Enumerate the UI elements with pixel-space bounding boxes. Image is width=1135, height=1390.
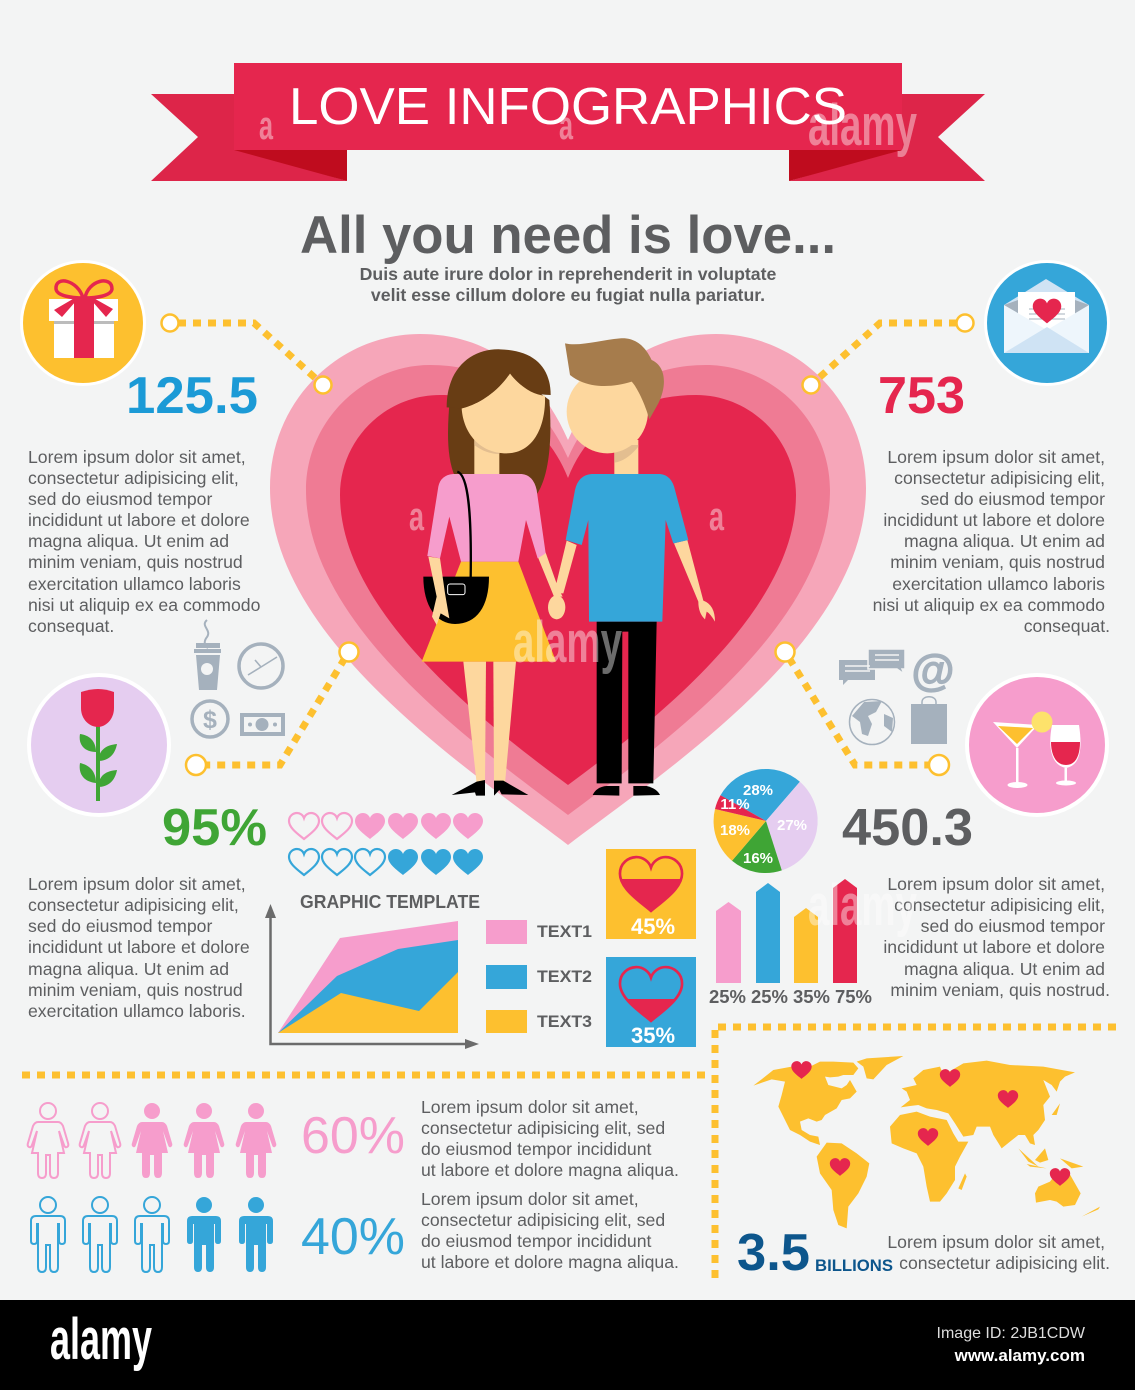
- stat: 3.5 billions: 3.5: [737, 1224, 810, 1282]
- text block: top right: [873, 447, 1110, 636]
- arrow bar chart: 25%: [709, 987, 746, 1007]
- world map: [753, 1056, 1100, 1228]
- text block: middle right: magna aliqua. Ut enim ad: [904, 959, 1105, 979]
- text block: middle right: consectetur adipisicing elit,: [894, 895, 1105, 915]
- watermarks: a: [559, 104, 573, 148]
- text block: middle left: sed do eiusmod tempor: [28, 916, 212, 936]
- footer image id: Image ID: 2JB1CDW: [937, 1325, 1086, 1342]
- pie chart: 27%: [777, 817, 807, 834]
- arrow bar chart: 25%: [751, 987, 788, 1007]
- text block: map: [887, 1232, 1110, 1273]
- stat: 3.5 billions: [737, 1224, 893, 1282]
- text block: men: Lorem ipsum dolor sit amet,: [421, 1189, 639, 1209]
- chart title: GRAPHIC TEMPLATE: [300, 892, 480, 912]
- stat: 40%: 40%: [301, 1208, 405, 1266]
- text block: men: do eiusmod tempor incididunt: [421, 1231, 652, 1251]
- connector: letter to heart: [802, 314, 974, 394]
- stat: 125.5: 125.5: [126, 367, 258, 425]
- text block: map: consectetur adipisicing elit.: [899, 1253, 1110, 1273]
- chart legend: [486, 920, 592, 1033]
- text block: top left: consectetur adipisicing elit,: [28, 468, 239, 488]
- icon: shopping bag: [911, 697, 947, 744]
- subheading: Duis aute irure dolor in reprehenderit in voluptate: [360, 264, 777, 284]
- woman figure: [422, 349, 563, 796]
- banner title text: LOVE INFOGRAPHICS: [289, 78, 847, 136]
- text block: middle right: minim veniam, quis nostrud.: [890, 980, 1110, 1000]
- text block: men: consectetur adipisicing elit, sed: [421, 1210, 665, 1230]
- icon: at sign: @: [912, 646, 954, 695]
- watermarks: alamy: [808, 93, 917, 158]
- title banner ribbon: [151, 63, 985, 181]
- text block: top right: incididunt ut labore et dolore: [883, 510, 1105, 530]
- watermarks: a: [259, 104, 273, 148]
- icon: rose: [27, 673, 171, 817]
- text block: women: [421, 1097, 679, 1180]
- text block: middle right: Lorem ipsum dolor sit amet,: [887, 874, 1105, 894]
- icon: dollar coin: [192, 701, 228, 737]
- man figure: [554, 338, 715, 796]
- icon: gift: [20, 260, 146, 386]
- text block: women: consectetur adipisicing elit, sed: [421, 1118, 665, 1138]
- text block: top right: nisi ut aliquip ex ea commodo: [873, 595, 1105, 615]
- text block: men: ut labore et dolore magna aliqua.: [421, 1252, 679, 1272]
- text block: map: Lorem ipsum dolor sit amet,: [887, 1232, 1105, 1252]
- heart gauge 45%: [606, 849, 696, 939]
- connector: cocktails to heart: [776, 642, 949, 775]
- icon: coffee cup: [194, 620, 221, 690]
- text block: middle right: sed do eiusmod tempor: [921, 916, 1105, 936]
- icon: cocktails: [965, 673, 1109, 817]
- text block: top right: consequat.: [1024, 616, 1110, 636]
- connector: rose to heart: [186, 642, 358, 775]
- stat: 95%: 95%: [162, 799, 267, 857]
- text block: top left: Lorem ipsum dolor sit amet,: [28, 447, 246, 467]
- pie chart: 11%: [720, 796, 750, 813]
- text block: top left: minim veniam, quis nostrud: [28, 552, 243, 572]
- text block: middle left: [28, 874, 250, 1021]
- text block: middle right: [883, 874, 1110, 1000]
- icon: speech bubbles: [839, 649, 905, 685]
- heart gauge 45%: 45%: [631, 914, 675, 939]
- central layered heart: [270, 334, 866, 845]
- text block: top left: magna aliqua. Ut enim ad: [28, 531, 229, 551]
- text block: top left: [28, 447, 261, 636]
- pie chart: 28%: [743, 782, 773, 799]
- pie chart: 16%: [743, 850, 773, 867]
- text block: middle left: consectetur adipisicing elit,: [28, 895, 239, 915]
- heart gauge 35%: [606, 957, 696, 1048]
- text block: top left: consequat.: [28, 616, 114, 636]
- text block: top left: incididunt ut labore et dolore: [28, 510, 250, 530]
- text block: middle left: magna aliqua. Ut enim ad: [28, 959, 229, 979]
- connector: gift to heart: [162, 314, 332, 394]
- text block: middle left: incididunt ut labore et dolore: [28, 937, 250, 957]
- text block: top right: Lorem ipsum dolor sit amet,: [887, 447, 1105, 467]
- text block: top right: magna aliqua. Ut enim ad: [904, 531, 1105, 551]
- text block: women: Lorem ipsum dolor sit amet,: [421, 1097, 639, 1117]
- footer bar: [0, 1300, 1135, 1390]
- watermarks: alamy: [808, 873, 917, 938]
- chart legend: TEXT1: [537, 922, 592, 941]
- arrow bar chart: [709, 879, 872, 1007]
- text block: top right: sed do eiusmod tempor: [921, 489, 1105, 509]
- chart legend: TEXT3: [537, 1012, 592, 1031]
- icon: dollar coin: $: [203, 706, 217, 734]
- icon: banknote: [240, 713, 285, 736]
- text block: top right: consectetur adipisicing elit,: [894, 468, 1105, 488]
- footer url: www.alamy.com: [954, 1346, 1085, 1365]
- text block: men: [421, 1189, 679, 1272]
- text block: top left: nisi ut aliquip ex ea commodo: [28, 595, 261, 615]
- main heading: All you need is love...: [300, 206, 836, 265]
- text block: top left: sed do eiusmod tempor: [28, 489, 212, 509]
- footer logo: alamy: [50, 1307, 152, 1372]
- text block: women: do eiusmod tempor incididunt: [421, 1139, 652, 1159]
- subheading: [360, 264, 777, 305]
- arrow bar chart: 75%: [835, 987, 872, 1007]
- text block: top right: minim veniam, quis nostrud: [890, 552, 1105, 572]
- text block: middle right: incididunt ut labore et dolore: [883, 937, 1105, 957]
- text block: middle left: minim veniam, quis nostrud: [28, 980, 243, 1000]
- heart gauge 35%: 35%: [631, 1023, 675, 1048]
- watermarks: a: [409, 495, 425, 539]
- icon: love letter: [984, 260, 1110, 386]
- text block: middle left: Lorem ipsum dolor sit amet,: [28, 874, 246, 894]
- pie chart: 18%: [720, 822, 750, 839]
- watermarks: a: [709, 495, 725, 539]
- blue hearts rating: [289, 849, 483, 875]
- couple illustration: [422, 338, 715, 796]
- text block: top right: exercitation ullamco laboris: [892, 574, 1105, 594]
- joined hands: [548, 595, 565, 619]
- stat: 450.3: 450.3: [842, 799, 973, 857]
- watermarks: alamy: [513, 610, 622, 675]
- watermarks: [259, 93, 917, 938]
- area chart: [265, 892, 480, 1049]
- handbag: [423, 472, 489, 624]
- icon: globe: [850, 700, 894, 744]
- arrow bar chart: 35%: [793, 987, 830, 1007]
- icon: clock: [239, 644, 283, 688]
- text block: top left: exercitation ullamco laboris: [28, 574, 241, 594]
- text block: middle left: exercitation ullamco laboris.: [28, 1001, 246, 1021]
- stat: 753: 753: [878, 367, 965, 425]
- women pictogram row: [28, 1103, 276, 1178]
- men pictogram row: [31, 1197, 273, 1272]
- pie chart: [714, 769, 818, 873]
- text block: women: ut labore et dolore magna aliqua.: [421, 1160, 679, 1180]
- stat: 3.5 billions: BILLIONS: [815, 1256, 893, 1275]
- chart legend: TEXT2: [537, 967, 592, 986]
- subheading: velit esse cillum dolore eu fugiat nulla pariatur.: [371, 285, 765, 305]
- pink hearts rating: [289, 813, 483, 839]
- stat: 60%: 60%: [301, 1107, 405, 1165]
